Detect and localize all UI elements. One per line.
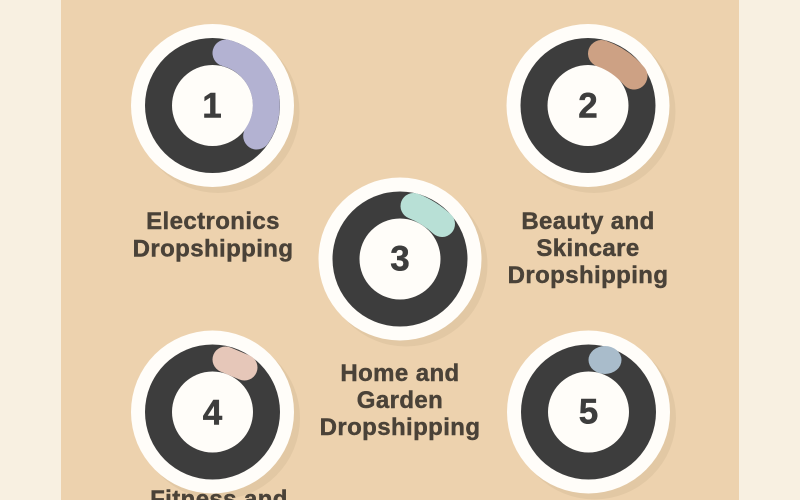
label: home and garden dropshipping: Garden — [357, 387, 443, 414]
label: beauty and skincare dropshipping: Dropshipping — [508, 262, 668, 289]
donut 2: beauty and skincare — [506, 24, 676, 193]
label: beauty and skincare dropshipping: Skincare — [536, 235, 640, 262]
donut 3: home and garden — [318, 178, 488, 346]
label: home and garden dropshipping: Home and — [340, 360, 460, 387]
donut 1: electronics — [131, 24, 300, 193]
donut 5 — [507, 330, 676, 500]
donut 2: beauty and skincare: 2 — [578, 86, 598, 126]
donut 5: 5 — [579, 392, 598, 432]
label: beauty and skincare dropshipping: Beauty and — [521, 208, 655, 235]
label: electronics dropshipping: Electronics — [146, 208, 280, 235]
donut 4: fitness — [131, 330, 300, 500]
donut 4: fitness: 4 — [203, 394, 223, 432]
donut 1: electronics: 1 — [202, 86, 222, 126]
donut 3: home and garden: 3 — [390, 240, 410, 278]
label: electronics dropshipping: Dropshipping — [133, 236, 293, 262]
label: home and garden dropshipping: Dropshipping — [320, 414, 480, 441]
